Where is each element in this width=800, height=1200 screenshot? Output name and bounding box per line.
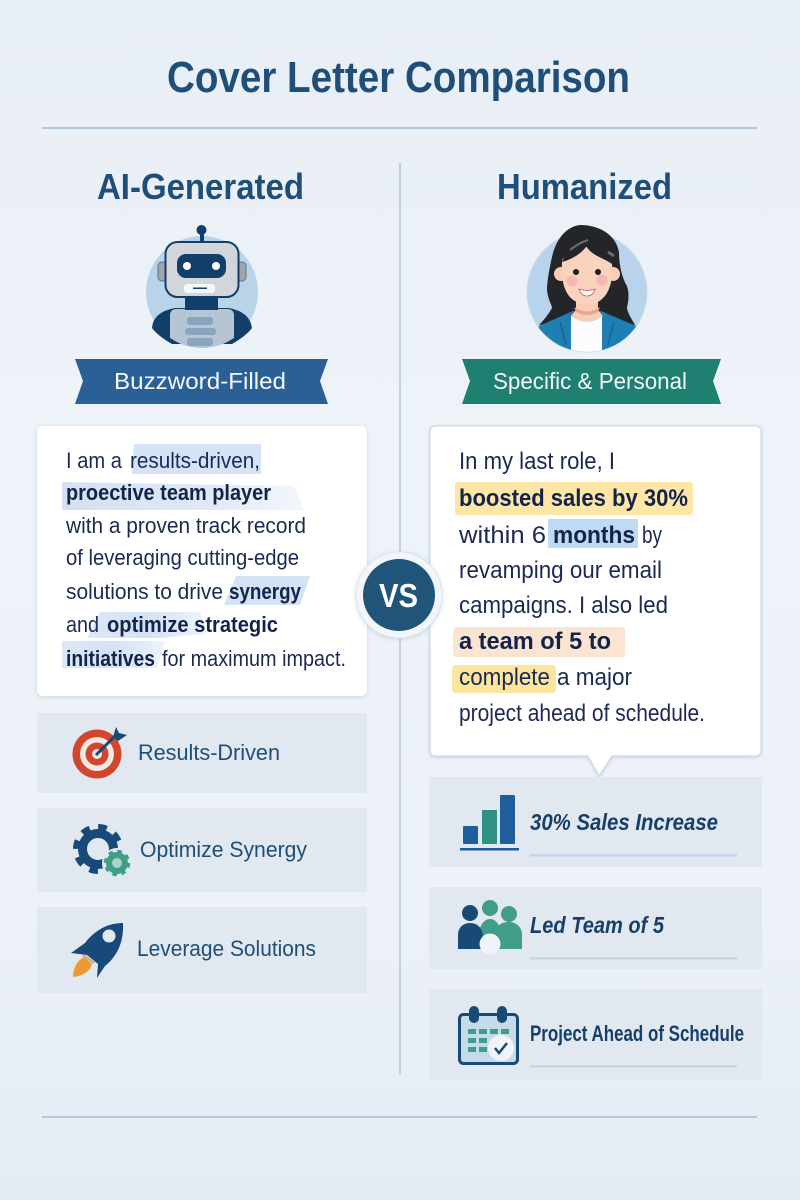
letter text: AI-generated: optimize strategic xyxy=(107,612,278,637)
letter text: humanized: revamping our email xyxy=(459,557,662,584)
heading: Humanized: Humanized xyxy=(497,166,672,207)
letter text: humanized: boosted sales by 30% xyxy=(459,485,688,512)
letter text: humanized: campaigns. I also led xyxy=(459,592,668,619)
letter text: AI-generated: proective team player xyxy=(66,480,271,505)
letter text: humanized: a team of 5 to xyxy=(459,628,611,655)
heading: AI-Generated: AI-Generated xyxy=(97,166,304,207)
chip: Leverage Solutions: Leverage Solutions xyxy=(137,936,316,961)
chip: Project Ahead of Schedule xyxy=(429,989,762,1080)
chip: Led Team of 5: Led Team of 5 xyxy=(530,912,665,938)
chip: Optimize Synergy xyxy=(37,808,367,892)
panel: AI-generated letter xyxy=(37,426,367,696)
icon: bar chart xyxy=(460,795,519,850)
letter text: AI-generated xyxy=(65,448,346,671)
letter text: humanized: In my last role, I xyxy=(459,448,615,475)
letter text: humanized xyxy=(458,448,705,727)
icon: target xyxy=(72,727,127,778)
letter text: AI-generated: for maximum impact. xyxy=(162,646,346,671)
icon: calendar xyxy=(460,1006,518,1064)
letter text: humanized: complete xyxy=(459,664,550,691)
letter text: humanized: project ahead of schedule. xyxy=(459,700,705,727)
letter text: AI-generated: I am a xyxy=(66,448,123,473)
chip: Project Ahead of Schedule: Project Ahead of Schedule xyxy=(530,1021,744,1046)
badge: VS xyxy=(356,552,442,638)
chip: Optimize Synergy: Optimize Synergy xyxy=(140,837,307,862)
letter text: AI-generated: synergy xyxy=(229,579,302,604)
chip: Results-Driven: Results-Driven xyxy=(138,740,280,765)
letter text: humanized: months xyxy=(553,522,635,549)
icon: woman avatar xyxy=(527,225,647,360)
banner: Buzzword-Filled: Buzzword-Filled xyxy=(114,368,286,394)
chip: 30% Sales Increase xyxy=(429,777,762,867)
chip: Leverage Solutions xyxy=(37,907,367,993)
panel: humanized letter xyxy=(430,426,761,776)
chip: Led Team of 5 xyxy=(429,887,762,969)
chip: 30% Sales Increase: 30% Sales Increase xyxy=(530,809,718,835)
letter text: humanized: by xyxy=(642,522,662,549)
highlights: buzzwords xyxy=(62,444,310,668)
letter text: humanized: within 6 xyxy=(458,522,546,549)
chip: Results-Driven xyxy=(37,713,367,793)
banner: Specific & Personal: Specific & Personal xyxy=(493,368,687,394)
badge: VS: VS xyxy=(379,577,418,614)
letter text: AI-generated: solutions to drive xyxy=(66,579,223,604)
letter text: AI-generated: with a proven track record xyxy=(65,513,306,538)
letter text: AI-generated: and xyxy=(66,612,99,637)
icon: team xyxy=(458,900,522,954)
banner: Specific & Personal xyxy=(462,359,721,404)
icon: gears xyxy=(77,828,132,878)
icon: rocket xyxy=(71,923,123,978)
letter text: AI-generated: of leveraging cutting-edge xyxy=(66,545,299,570)
title: Cover Letter Comparison xyxy=(167,53,630,102)
icon: robot avatar xyxy=(146,225,258,354)
banner: Buzzword-Filled xyxy=(75,359,328,404)
letter text: AI-generated: initiatives xyxy=(66,646,155,671)
highlights: specifics xyxy=(452,482,693,693)
letter text: humanized: a major xyxy=(557,664,632,691)
letter text: AI-generated: results-driven, xyxy=(130,448,260,473)
